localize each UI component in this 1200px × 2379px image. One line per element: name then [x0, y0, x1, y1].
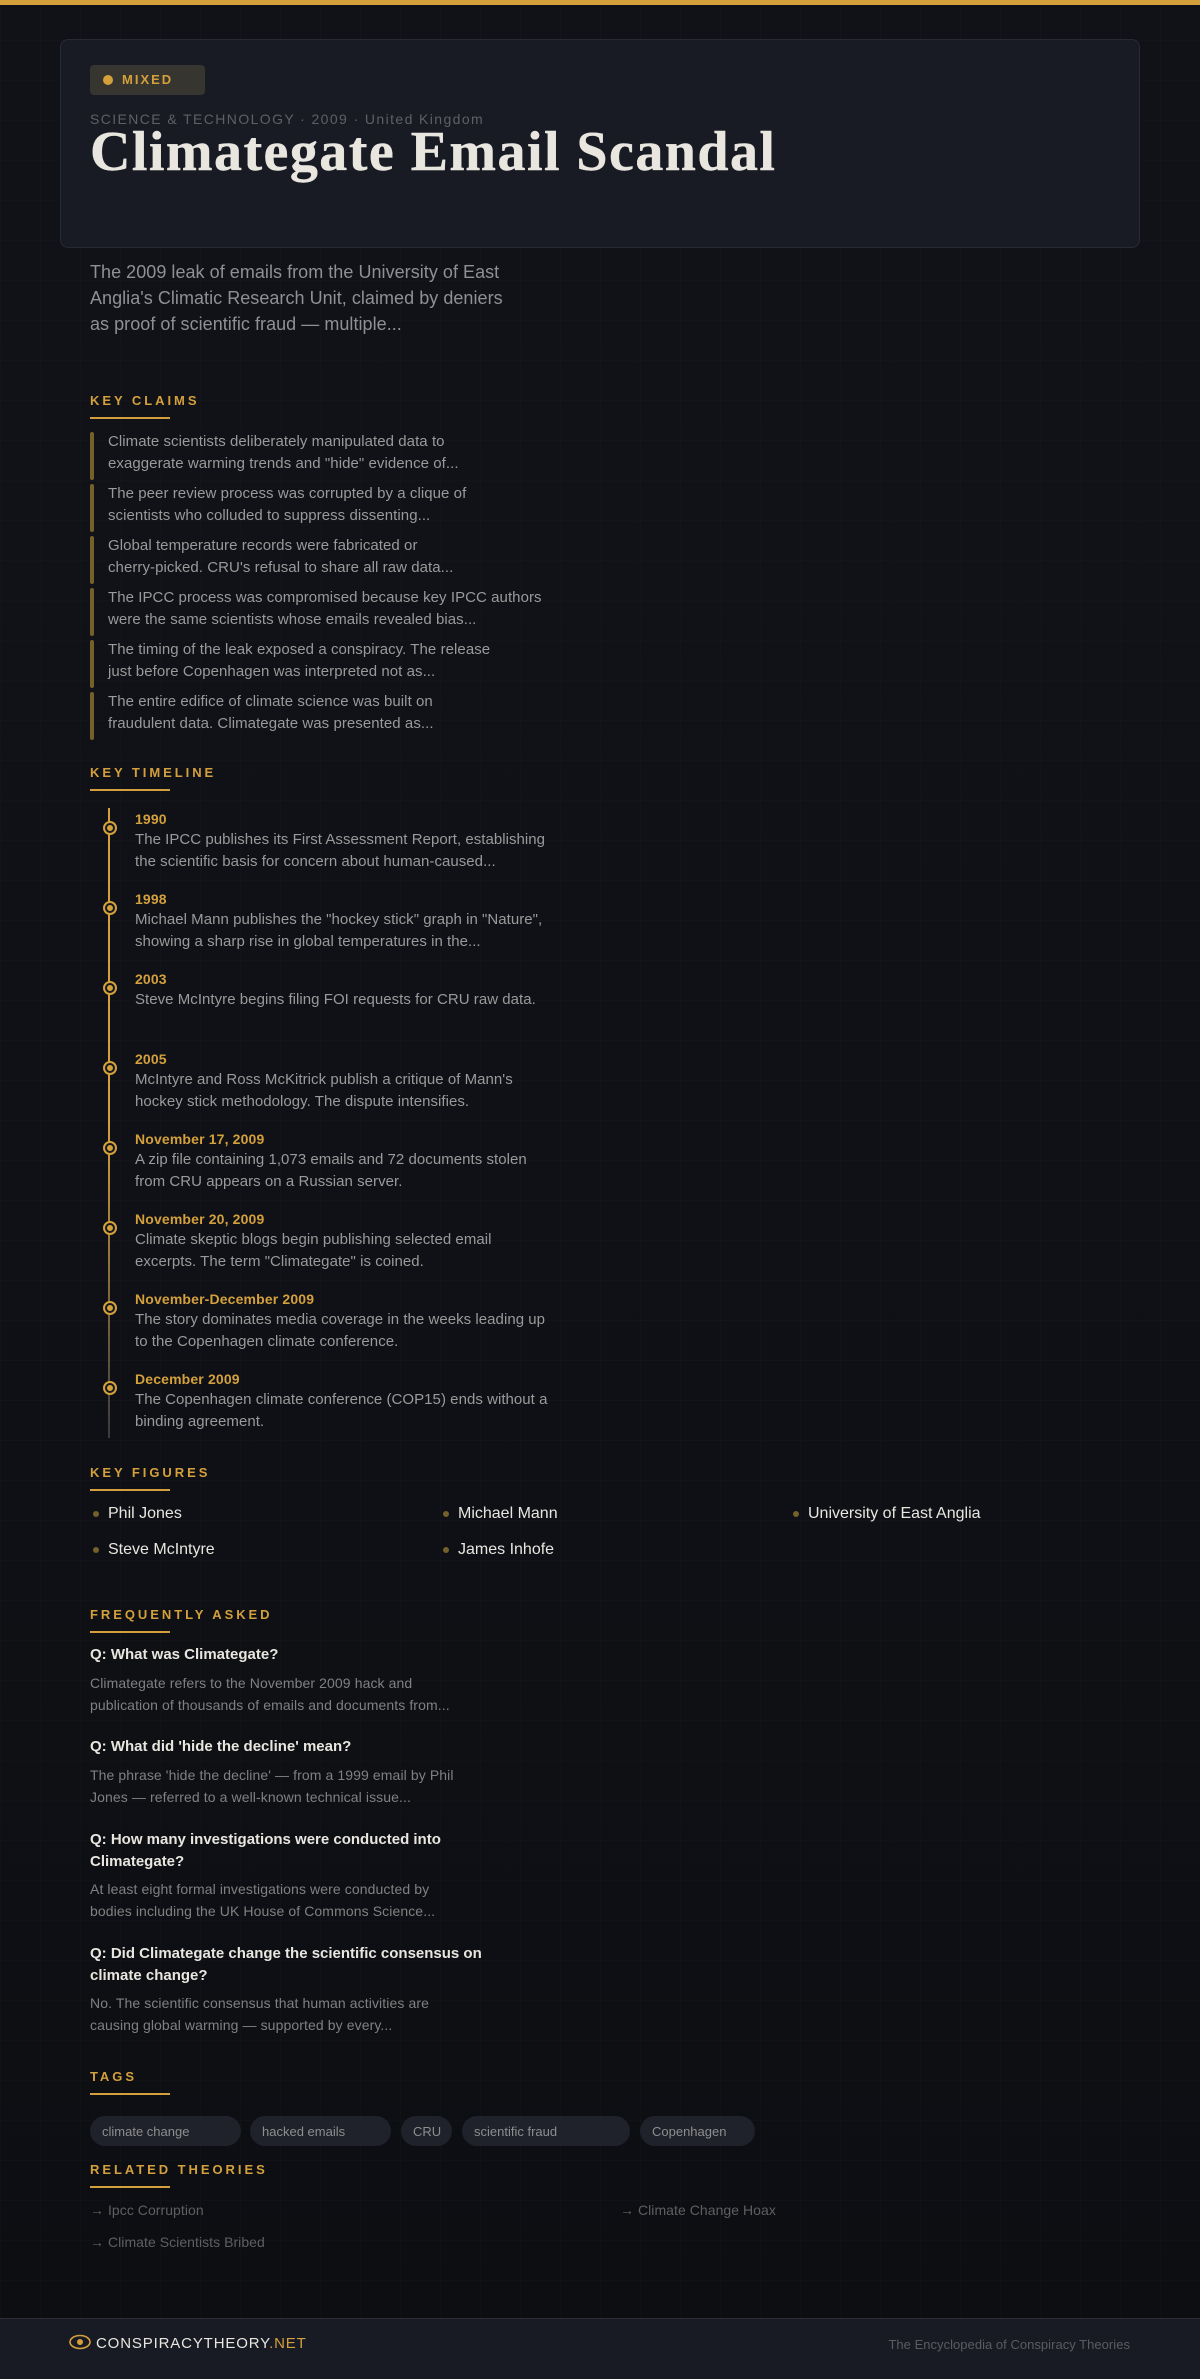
claim 3 — [90, 535, 560, 584]
figure: Steve McIntyre: Steve McIntyre — [108, 1541, 215, 1558]
event 1990: 1990 — [135, 811, 167, 827]
event Dec 2009 — [103, 1371, 548, 1430]
panel: tags — [90, 2116, 755, 2146]
FAQ 2 — [90, 1738, 454, 1805]
claim 4: The IPCC process was compromised because key IPCC authors — [108, 589, 542, 606]
tag: CRU — [413, 2124, 441, 2139]
FAQ 3: bodies including the UK House of Commons Science... — [90, 1903, 435, 1919]
claim 5: The timing of the leak exposed a conspiracy. The release — [108, 641, 490, 658]
heading: frequently asked: FREQUENTLY ASKED — [90, 1607, 273, 1622]
panel: related theories — [90, 2202, 776, 2250]
event 2003: 2003 — [135, 971, 167, 987]
claim 3: Global temperature records were fabricated or — [108, 537, 418, 554]
tag: Copenhagen — [652, 2124, 726, 2139]
claim 2: The peer review process was corrupted by a clique of — [108, 485, 466, 502]
claim 6: fraudulent data. Climategate was presented as... — [108, 715, 434, 732]
FAQ 1: Climategate refers to the November 2009 hack and — [90, 1675, 412, 1691]
tag: scientific fraud — [474, 2124, 557, 2139]
icon: eye logo — [69, 2334, 91, 2350]
badge: mixed verdict: MIXED — [122, 72, 173, 87]
heading: key figures: KEY FIGURES — [90, 1465, 210, 1480]
event 1990: The IPCC publishes its First Assessment Report, establishing — [135, 831, 545, 848]
event Nov 20 2009: November 20, 2009 — [135, 1211, 264, 1227]
event 1998: showing a sharp rise in global temperatures in the... — [135, 933, 481, 950]
heading: related theories: RELATED THEORIES — [90, 2162, 268, 2177]
FAQ 2: The phrase 'hide the decline' — from a 1999 email by Phil — [90, 1767, 454, 1783]
panel: footer — [0, 2318, 1200, 2379]
event 2005: hockey stick methodology. The dispute intensifies. — [135, 1093, 469, 1110]
claim 1 — [90, 431, 560, 480]
FAQ 3: Climategate? — [90, 1853, 184, 1870]
event Nov 20 2009: excerpts. The term "Climategate" is coined. — [135, 1253, 424, 1270]
event 1990 — [103, 811, 545, 870]
heading: tags: TAGS — [90, 2069, 137, 2084]
event 2005: McIntyre and Ross McKitrick publish a critique of Mann's — [135, 1071, 513, 1088]
figure: Phil Jones: Phil Jones — [108, 1505, 182, 1522]
event 2005 — [103, 1051, 513, 1110]
FAQ 2: Jones — referred to a well-known technical issue... — [90, 1789, 411, 1805]
event 1998: Michael Mann publishes the "hockey stick" graph in "Nature", — [135, 911, 542, 928]
event Nov 17 2009: November 17, 2009 — [135, 1131, 264, 1147]
FAQ 2: Q: What did 'hide the decline' mean? — [90, 1738, 351, 1755]
figure: James Inhofe: James Inhofe — [458, 1541, 554, 1558]
claim 1: Climate scientists deliberately manipulated data to — [108, 433, 445, 450]
figure: Michael Mann: Michael Mann — [458, 1505, 558, 1522]
panel: FAQ — [90, 1646, 482, 2033]
event Nov 20 2009 — [103, 1211, 491, 1270]
intro text: as proof of scientific fraud — multiple... — [90, 314, 402, 334]
intro text: The 2009 leak of emails from the University of East — [90, 262, 499, 282]
chart: timeline — [103, 808, 548, 1438]
tag — [250, 2116, 391, 2146]
tag — [640, 2116, 755, 2146]
tag — [90, 2116, 241, 2146]
claim 5 — [90, 639, 560, 688]
FAQ 1 — [90, 1646, 450, 1713]
intro text: Anglia's Climatic Research Unit, claimed by deniers — [90, 288, 503, 308]
tag: hacked emails — [262, 2124, 345, 2139]
badge: mixed verdict — [90, 65, 205, 95]
claim 2 — [90, 483, 560, 532]
link: → Climate Change Hoax — [620, 2202, 776, 2218]
top accent bar — [0, 0, 1200, 5]
FAQ 4: No. The scientific consensus that human activities are — [90, 1995, 429, 2011]
panel: key figures list — [93, 1505, 981, 1558]
FAQ 3: Q: How many investigations were conducted into — [90, 1831, 441, 1848]
claim 6: The entire edifice of climate science was built on — [108, 693, 433, 710]
figure: University of East Anglia: University of East Anglia — [808, 1505, 981, 1522]
panel: header card — [60, 39, 1140, 248]
event Nov-Dec 2009: to the Copenhagen climate conference. — [135, 1333, 398, 1350]
event 2003 — [103, 971, 536, 1008]
FAQ 3: At least eight formal investigations were conducted by — [90, 1881, 429, 1897]
event 2003: Steve McIntyre begins filing FOI requests for CRU raw data. — [135, 991, 536, 1008]
heading: key claims: KEY CLAIMS — [90, 393, 199, 408]
FAQ 3 — [90, 1831, 441, 1919]
FAQ 4 — [90, 1945, 482, 2033]
logo wordmark: CONSPIRACYTHEORY.NET — [96, 2335, 307, 2352]
title: Climategate Email Scandal — [90, 121, 776, 183]
tag: climate change — [102, 2124, 189, 2139]
event Nov 20 2009: Climate skeptic blogs begin publishing selected email — [135, 1231, 491, 1248]
claim 6 — [90, 691, 560, 740]
FAQ 1: Q: What was Climategate? — [90, 1646, 278, 1663]
footer tagline: The Encyclopedia of Conspiracy Theories — [888, 2337, 1130, 2352]
panel: key claims list — [90, 432, 542, 740]
claim 2: scientists who colluded to suppress dissenting... — [108, 507, 430, 524]
event Dec 2009: The Copenhagen climate conference (COP15) ends without a — [135, 1391, 547, 1408]
FAQ 4: Q: Did Climategate change the scientific consensus on — [90, 1945, 482, 1962]
event Nov 17 2009: A zip file containing 1,073 emails and 72 documents stolen — [135, 1151, 527, 1168]
timeline spine — [108, 808, 110, 1438]
tag — [401, 2116, 452, 2146]
claim 1: exaggerate warming trends and "hide" evidence of... — [108, 455, 459, 472]
FAQ 4: climate change? — [90, 1967, 208, 1984]
event Nov-Dec 2009: November-December 2009 — [135, 1291, 314, 1307]
claim 4 — [90, 587, 560, 636]
event Nov 17 2009: from CRU appears on a Russian server. — [135, 1173, 402, 1190]
event 1990: the scientific basis for concern about human-caused... — [135, 853, 496, 870]
event Nov 17 2009 — [103, 1131, 527, 1190]
FAQ 4: causing global warming — supported by every... — [90, 2017, 392, 2033]
event 1998: 1998 — [135, 891, 167, 907]
event Nov-Dec 2009: The story dominates media coverage in the weeks leading up — [135, 1311, 545, 1328]
event 2005: 2005 — [135, 1051, 167, 1067]
link: → Climate Scientists Bribed — [90, 2234, 265, 2250]
tag — [462, 2116, 630, 2146]
claim 3: cherry-picked. CRU's refusal to share all raw data... — [108, 559, 453, 576]
event 1998 — [103, 891, 542, 950]
link: → Ipcc Corruption — [90, 2202, 204, 2218]
intro text — [90, 262, 503, 334]
event Dec 2009: December 2009 — [135, 1371, 240, 1387]
event Dec 2009: binding agreement. — [135, 1413, 264, 1430]
FAQ 1: publication of thousands of emails and documents from... — [90, 1697, 450, 1713]
category meta line: SCIENCE & TECHNOLOGY · 2009 · United Kingdom — [90, 111, 484, 127]
claim 4: were the same scientists whose emails revealed bias... — [108, 611, 476, 628]
event Nov-Dec 2009 — [103, 1291, 545, 1350]
claim 5: just before Copenhagen was interpreted not as... — [108, 663, 435, 680]
heading: key timeline: KEY TIMELINE — [90, 765, 216, 780]
